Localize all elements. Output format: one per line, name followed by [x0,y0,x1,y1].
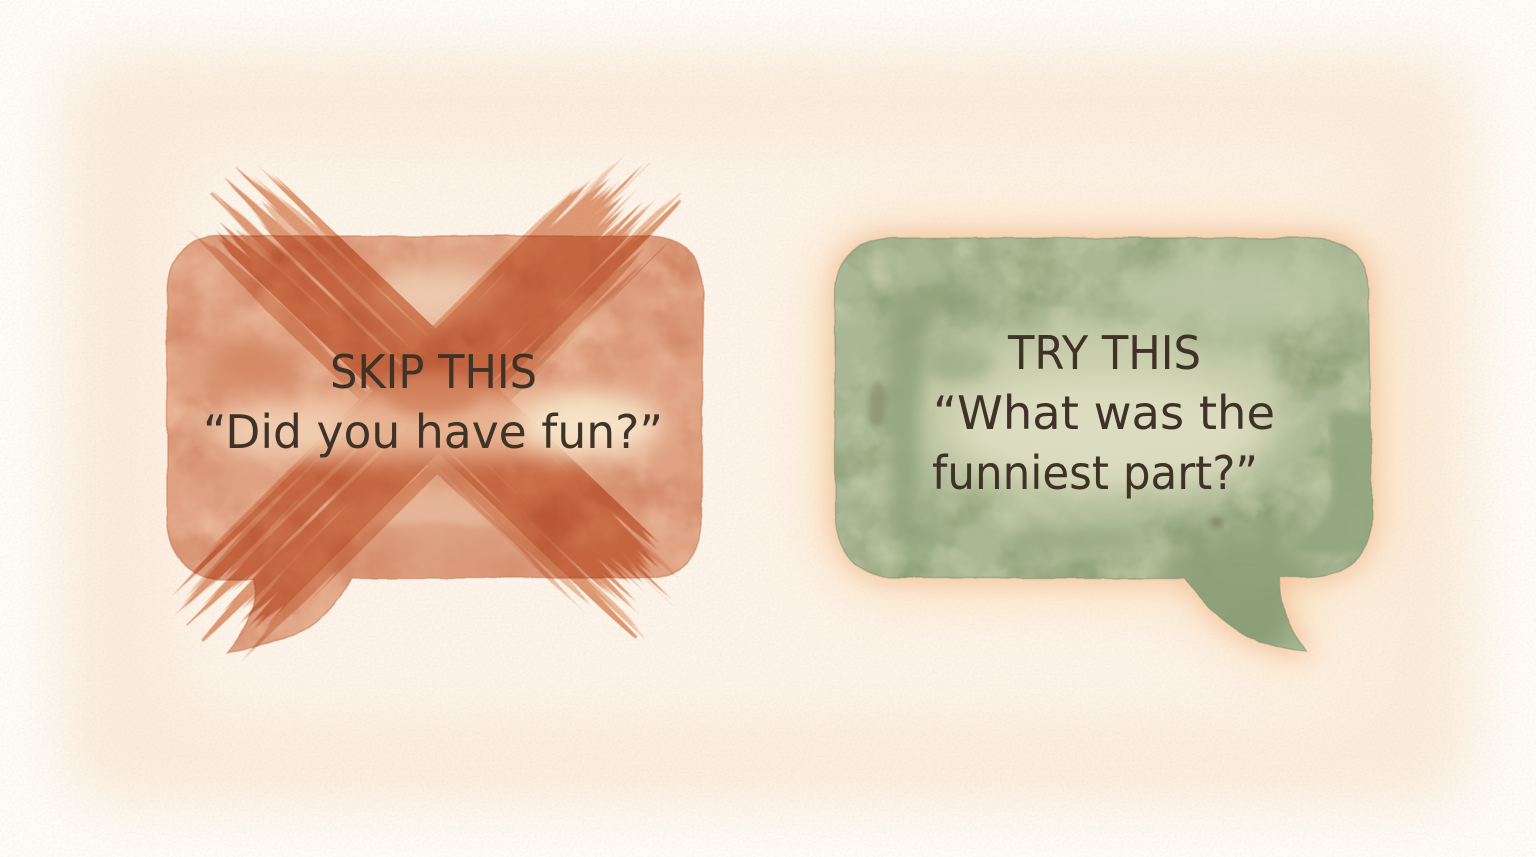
text: try this: TRY THIS [1007,326,1201,380]
text backdrop glow [205,376,662,459]
panel: try this speech bubble [820,220,1390,660]
text: skip this: “Did you have fun?” [203,405,663,459]
text: try this [932,326,1275,500]
text: skip this [203,345,663,459]
panel: skip this speech bubble [165,158,705,660]
icon: brush stroke X [156,136,699,679]
bubble shape: red [150,220,720,660]
bubble shape: green [834,236,1374,652]
text: skip this: SKIP THIS [330,345,537,399]
text: try this: funniest part?” [932,446,1258,500]
text: try this: “What was the [933,386,1275,440]
warm glow [835,238,1372,652]
